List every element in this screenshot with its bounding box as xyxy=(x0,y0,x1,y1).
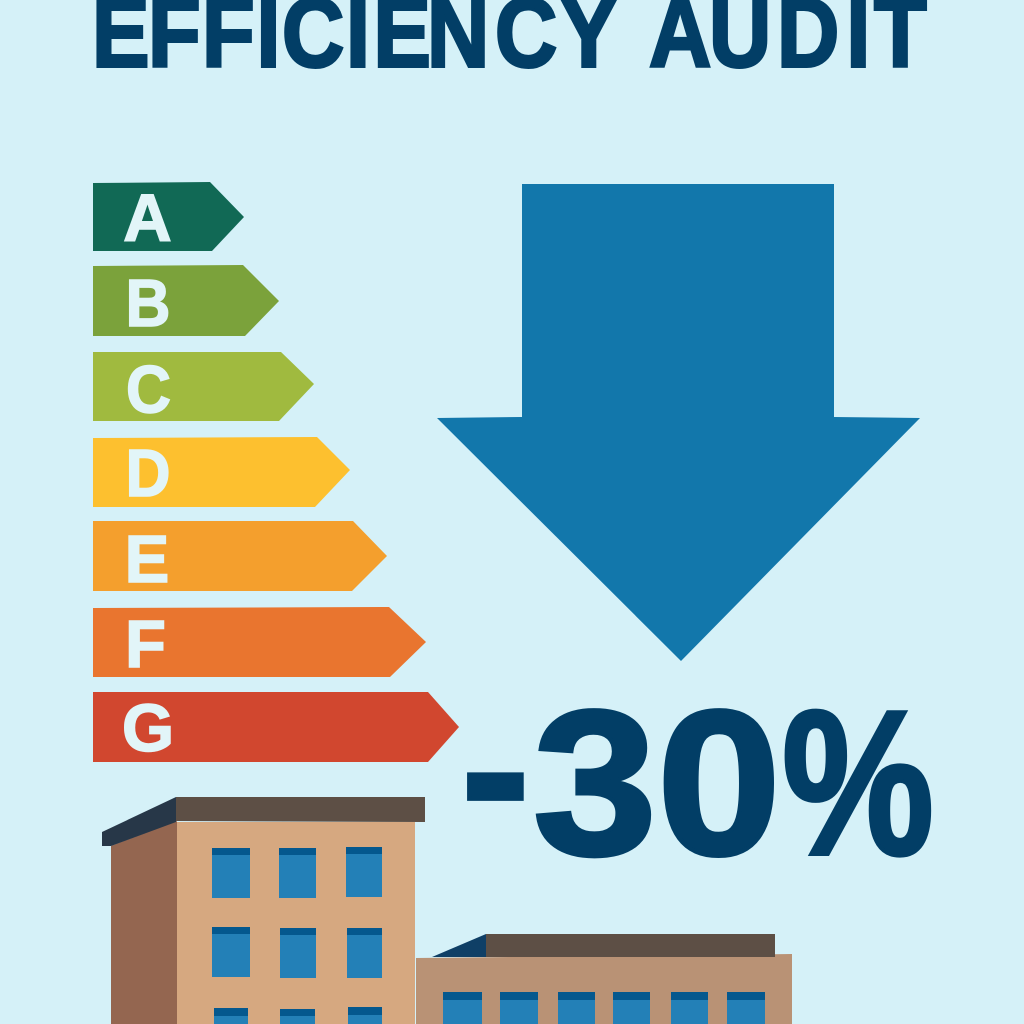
rating bar G: G xyxy=(122,691,174,766)
rating bar A: A xyxy=(123,181,172,256)
rating bar C: C xyxy=(126,352,171,428)
rating bar E: E xyxy=(125,522,169,597)
low building xyxy=(416,934,792,1024)
energy rating scale xyxy=(93,181,459,766)
rating bar G xyxy=(93,691,459,766)
rating bar A xyxy=(93,181,244,256)
rating bar F: F xyxy=(125,607,166,682)
reduction figure: % xyxy=(782,668,934,898)
rating bar D: D xyxy=(126,436,170,511)
reduction figure: - xyxy=(461,654,530,884)
down arrow xyxy=(437,184,920,661)
rating bar C xyxy=(93,352,314,428)
low building windows xyxy=(443,992,765,1024)
rating bar D xyxy=(93,436,350,511)
reduction figure: 30 xyxy=(533,668,781,898)
tall building windows xyxy=(212,847,382,1024)
rating bar B xyxy=(93,265,279,341)
building illustration xyxy=(102,797,792,1024)
rating bar B: B xyxy=(126,266,170,341)
tall building xyxy=(102,797,425,1024)
rating bar E xyxy=(93,521,387,597)
rating bar F xyxy=(93,607,426,682)
